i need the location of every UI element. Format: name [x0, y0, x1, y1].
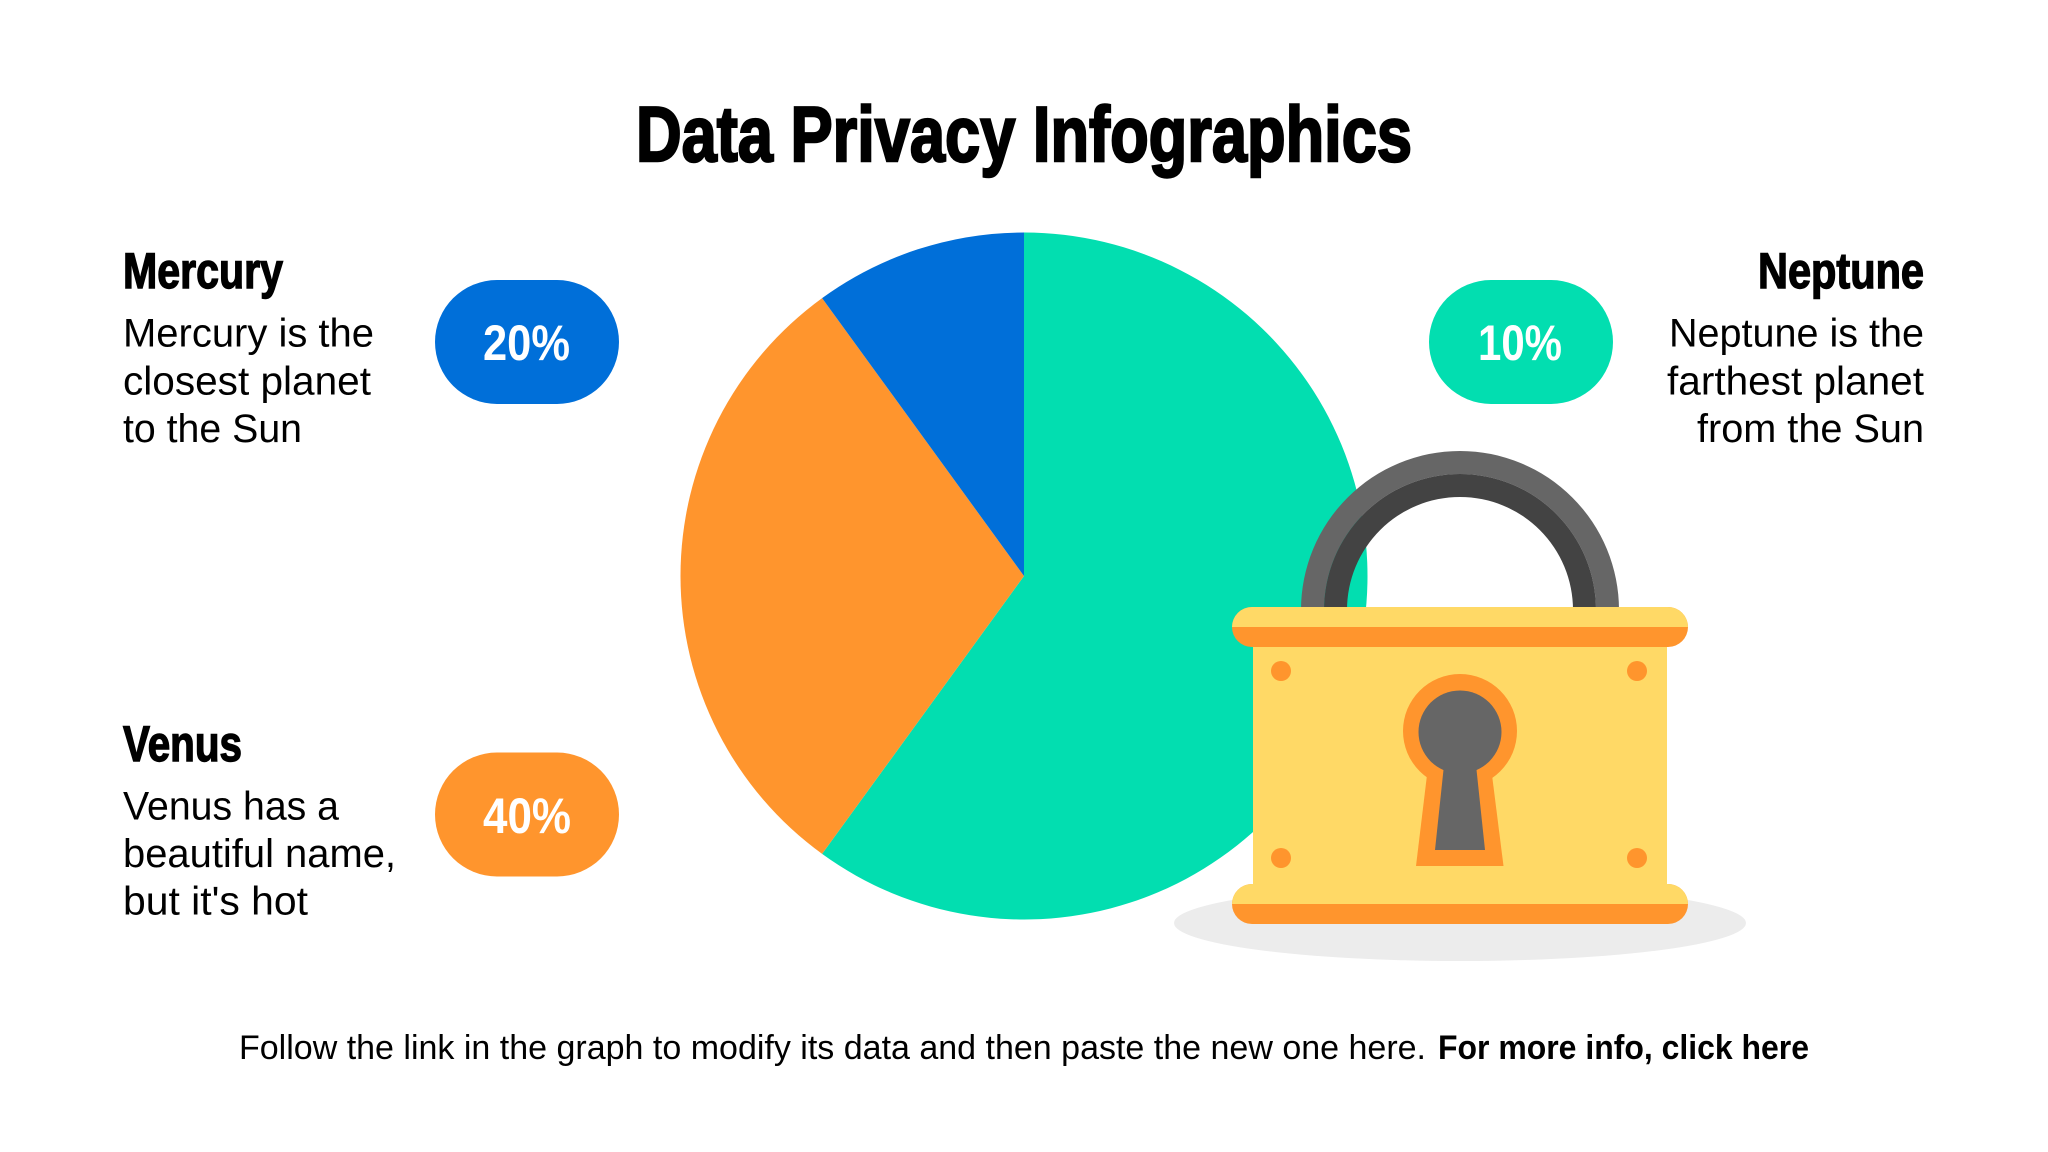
pie chart	[681, 232, 1368, 920]
badge: 10%	[1429, 280, 1613, 404]
keyhole	[1403, 674, 1517, 866]
badge: 20%	[435, 280, 619, 404]
text block: Neptune description: farthest planet	[1667, 360, 1924, 404]
text block: Neptune description: from the Sun	[1697, 407, 1924, 451]
badge: 40%	[435, 752, 619, 876]
text block: Neptune description: Neptune is the	[1669, 312, 1924, 356]
lock rivets	[1271, 661, 1647, 868]
pie slice: 10% blue	[822, 232, 1024, 576]
panel: Mercury	[123, 243, 619, 451]
lock body	[1232, 607, 1688, 924]
title: Data Privacy Infographics	[636, 90, 1412, 178]
text block: Mercury description	[123, 312, 374, 451]
footer note: For more info, click here	[1438, 1029, 1809, 1067]
panel: Venus	[123, 716, 619, 924]
text block: Mercury description: Mercury is the	[123, 312, 374, 356]
text block: Venus description: but it's hot	[123, 880, 308, 924]
pie slice: 30% orange	[681, 298, 1024, 854]
text block: Mercury description: to the Sun	[123, 407, 302, 451]
pie slice: 60% teal	[822, 232, 1368, 920]
text block: Venus description: Venus has a	[123, 784, 340, 828]
heading: Neptune: Neptune	[1758, 243, 1924, 299]
text block: Venus description	[123, 784, 396, 924]
panel: Neptune	[1429, 243, 1924, 451]
badge: 20%: 20%	[483, 315, 570, 371]
badge: 10%: 10%	[1478, 315, 1562, 371]
lock shadow	[1174, 885, 1746, 961]
heading: Mercury: Mercury	[123, 243, 283, 299]
heading: Venus: Venus	[123, 716, 242, 772]
text block: Venus description: beautiful name,	[123, 832, 396, 876]
icon: padlock	[1174, 451, 1746, 961]
badge: 40%: 40%	[483, 788, 571, 844]
text block: Mercury description: closest planet	[123, 360, 371, 404]
text block: Neptune description	[1667, 312, 1924, 451]
footer note: Follow the link in the graph to modify its data and then paste the new one here.	[239, 1029, 1426, 1067]
lock shackle	[1301, 451, 1619, 612]
